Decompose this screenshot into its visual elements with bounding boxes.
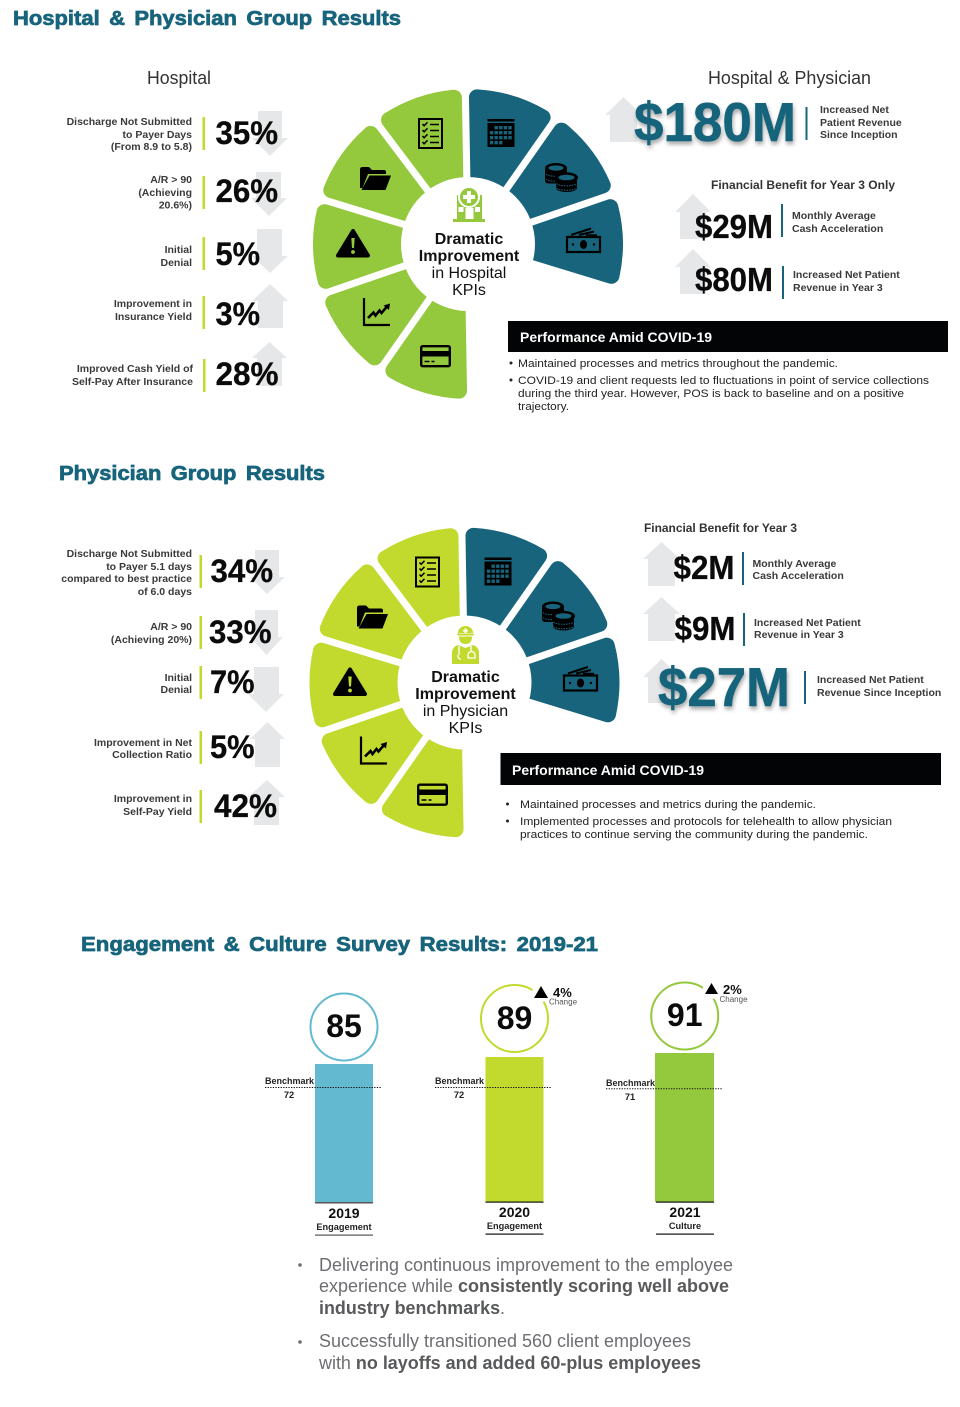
icon: checklist <box>416 558 439 586</box>
benchmark <box>606 1078 722 1102</box>
heading: Hospital: Hospital <box>147 67 211 88</box>
icon: line chart <box>364 298 390 325</box>
icon: money <box>567 228 600 252</box>
chart: survey bar 2020 <box>435 984 578 1235</box>
callout: $2M: Cash Acceleration <box>752 570 844 582</box>
KPI: insurance yield 3% <box>114 284 288 332</box>
year label: 2019 <box>328 1205 360 1221</box>
text block: survey takeaways: Successfully transitioned 560 client employees <box>319 1330 691 1351</box>
heading: engagement & culture survey results: Engagement & Culture Survey Results: 2019-21 <box>81 934 598 956</box>
wedges: revenue segments (teal) <box>447 93 616 278</box>
heading: financial benefit year 3 only: Financial Benefit for Year 3 Only <box>711 178 895 192</box>
year label <box>656 1204 714 1235</box>
center label: KPIs <box>452 282 486 299</box>
KPI: A/R over 90 26% <box>138 172 287 216</box>
center label: in Physician <box>423 703 508 720</box>
title: Hospital & Physician Group Results <box>13 8 401 30</box>
callout: $180M <box>605 91 902 153</box>
callout: $80M: Revenue in Year 3 <box>793 282 883 294</box>
KPI: discharge not submitted 35% <box>67 111 288 156</box>
KPI: discharge not submitted 35%: (From 8.9 to 5.8) <box>111 141 192 153</box>
KPI: initial denial 5%: 5% <box>216 236 260 272</box>
change indicator <box>702 981 748 1004</box>
KPI: initial denial 7%: 7% <box>210 664 254 700</box>
KPI: net collection ratio 5%: 5% <box>210 729 254 765</box>
KPI: discharge not submitted 34%: compared to best practice <box>61 573 192 585</box>
panel: hospital performance amid COVID-19: COVID-19 and client requests led to fluctuations in point of service collections <box>518 375 929 387</box>
callout: $9M: $9M <box>674 611 736 648</box>
panel: physician performance amid COVID-19: practices to continue serving the community during the pandemic. <box>520 829 868 841</box>
callout: $9M <box>643 597 861 648</box>
panel: physician performance amid COVID-19: Maintained processes and metrics during the pandemic. <box>520 799 816 811</box>
callout: $27M: Increased Net Patient <box>817 674 924 686</box>
KPI: A/R over 90 33%: (Achieving 20%) <box>111 634 192 646</box>
icon: warning <box>338 231 368 256</box>
change indicator: Change <box>720 995 748 1004</box>
icon: calendar <box>484 558 512 586</box>
icon: folder <box>357 606 388 628</box>
panel: physician performance amid COVID-19: Implemented processes and protocols for telehealth to allow physician <box>520 816 892 828</box>
change indicator: 4% <box>553 985 572 1000</box>
benchmark: 72 <box>284 1090 294 1100</box>
icon: checklist <box>419 119 442 148</box>
KPI: initial denial 5%: Initial <box>165 244 192 256</box>
benchmark: Benchmark <box>606 1078 656 1088</box>
center label <box>415 669 516 737</box>
icon: folder <box>360 167 391 190</box>
center label: Improvement <box>415 686 516 703</box>
chart: physician KPI wheel <box>317 532 612 833</box>
icon: warning <box>335 670 365 694</box>
KPI: discharge not submitted 35%: Discharge Not Submitted <box>67 116 192 128</box>
icon: hospital <box>453 186 485 222</box>
KPI: initial denial 5%: Denial <box>160 257 192 269</box>
icon: credit card <box>418 785 447 805</box>
icon: money <box>564 667 597 690</box>
benchmark: 71 <box>625 1092 635 1102</box>
score circle <box>310 994 378 1060</box>
KPI: initial denial 7%: Initial <box>165 672 192 684</box>
heading: physician group results: Physician Group Results <box>59 463 325 485</box>
KPI: net collection ratio 5%: Improvement in Net <box>94 737 192 749</box>
KPI: discharge not submitted 34%: 34% <box>210 553 273 589</box>
callout: $2M: Monthly Average <box>752 558 836 570</box>
icon: coins <box>542 602 575 630</box>
change indicator: Change <box>549 998 578 1006</box>
chart: survey bar 2019 <box>265 994 381 1236</box>
panel: physician financial benefit <box>643 521 941 718</box>
KPI: discharge not submitted 35%: 35% <box>216 115 278 151</box>
panel: hospital performance amid COVID-19: trajectory. <box>518 401 569 413</box>
center label: Improvement <box>419 248 520 265</box>
year label: Engagement <box>316 1222 372 1232</box>
callout: $27M: Revenue Since Inception <box>817 687 941 699</box>
panel: hospital & physician revenue callouts <box>605 91 902 299</box>
callout: $2M: $2M <box>674 550 734 587</box>
change indicator: 2% <box>723 982 742 997</box>
benchmark: Benchmark <box>265 1076 315 1086</box>
text block: survey takeaways: Delivering continuous improvement to the employee <box>319 1254 733 1275</box>
callout: $80M <box>675 249 900 299</box>
icon: line chart <box>361 736 387 764</box>
chart: survey bar 2021 <box>606 981 748 1235</box>
KPI: discharge not submitted 34%: to Payer 5.1 days <box>106 561 192 573</box>
KPI: discharge not submitted 34%: of 6.0 days <box>138 586 192 598</box>
panel: hospital KPI list <box>67 111 288 392</box>
KPI: cash yield 28%: Improved Cash Yield of <box>77 363 193 375</box>
KPI: net collection ratio 5% <box>94 722 285 767</box>
chart: hospital KPI wheel <box>320 93 616 395</box>
KPI: A/R over 90 26%: A/R > 90 <box>150 174 192 186</box>
KPI: cash yield 28%: 28% <box>216 356 278 392</box>
bar <box>315 1064 373 1202</box>
callout: $29M: $29M <box>695 209 773 246</box>
callout: $29M <box>675 194 883 246</box>
KPI: initial denial 7%: Denial <box>160 684 192 696</box>
year label: 2021 <box>669 1204 701 1220</box>
panel: hospital performance amid COVID-19: Performance Amid COVID-19 <box>520 329 712 345</box>
icon: coins <box>545 163 578 192</box>
center label: in Hospital <box>432 265 506 282</box>
KPI: insurance yield 3%: Improvement in <box>114 298 192 310</box>
wedges: KPI segments (green) <box>320 94 489 395</box>
KPI: initial denial 7% <box>160 664 284 712</box>
KPI: discharge not submitted 35%: to Payer Days <box>123 129 192 141</box>
callout: $80M: $80M <box>695 262 773 299</box>
year label <box>315 1205 373 1236</box>
center label: KPIs <box>449 720 482 737</box>
panel: physician performance amid COVID-19 <box>500 753 941 841</box>
text block: survey takeaways: industry benchmarks. <box>319 1297 505 1318</box>
year label: 2020 <box>499 1204 530 1220</box>
panel: hospital performance amid COVID-19: Maintained processes and metrics throughout the pandemic. <box>518 358 838 370</box>
year label: Culture <box>669 1221 701 1231</box>
panel: hospital performance amid COVID-19: during the third year. However, POS is back to baseline and on a positive <box>518 388 904 400</box>
callout: $180M: Since Inception <box>820 129 898 141</box>
callout: $80M: Increased Net Patient <box>793 269 900 281</box>
benchmark <box>265 1076 381 1100</box>
KPI: A/R over 90 33% <box>111 610 283 655</box>
center label: Dramatic <box>431 669 500 686</box>
benchmark <box>435 1076 552 1100</box>
KPI: A/R over 90 26%: 26% <box>216 173 278 209</box>
score circle: 89 <box>497 1000 532 1036</box>
KPI: A/R over 90 33%: 33% <box>209 614 272 650</box>
callout: $27M <box>643 656 941 718</box>
KPI: net collection ratio 5%: Collection Ratio <box>112 749 192 761</box>
panel: physician performance amid COVID-19: Performance Amid COVID-19 <box>512 762 704 778</box>
KPI: self-pay yield 42%: Self-Pay Yield <box>123 806 192 818</box>
KPI: insurance yield 3%: Insurance Yield <box>115 311 192 323</box>
callout: $180M: Increased Net <box>820 104 889 116</box>
KPI: initial denial 5% <box>160 229 288 273</box>
KPI: A/R over 90 26%: (Achieving <box>138 187 192 199</box>
text block: survey takeaways <box>298 1254 733 1373</box>
benchmark: Benchmark <box>435 1076 485 1086</box>
text block: survey takeaways: experience while consistently scoring well above <box>319 1275 729 1296</box>
center label: Dramatic <box>435 231 503 248</box>
callout: $9M: Increased Net Patient <box>754 617 861 629</box>
text block: survey takeaways: with no layoffs and added 60-plus employees <box>318 1352 701 1373</box>
KPI: cash yield 28%: Self-Pay After Insurance <box>72 376 193 388</box>
callout: $9M: Revenue in Year 3 <box>754 629 844 641</box>
bar <box>486 1057 544 1202</box>
callout: $27M: $27M <box>658 656 790 718</box>
KPI: cash yield 28% <box>72 342 287 392</box>
callout: $2M <box>643 542 844 587</box>
callout: $29M: Cash Acceleration <box>792 223 883 235</box>
bar <box>655 1053 714 1202</box>
score circle <box>651 982 718 1050</box>
heading: financial benefit year 3: Financial Benefit for Year 3 <box>644 521 797 535</box>
score circle <box>481 985 548 1052</box>
year label <box>486 1204 544 1235</box>
KPI: A/R over 90 26%: 20.6%) <box>159 200 192 212</box>
KPI: discharge not submitted 34%: Discharge Not Submitted <box>67 548 192 560</box>
callout: $180M: Patient Revenue <box>820 117 902 129</box>
panel: physician KPI list <box>61 548 285 825</box>
year label: Engagement <box>487 1221 542 1231</box>
panel: hospital performance amid COVID-19 <box>508 321 948 413</box>
wedges: revenue segments (teal) <box>444 532 612 716</box>
icon: credit card <box>421 346 450 366</box>
score circle: 85 <box>326 1008 362 1044</box>
heading: Hospital & Physician: Hospital & Physician <box>708 67 871 88</box>
wedges: KPI segments (lime) <box>317 532 485 833</box>
KPI: A/R over 90 33%: A/R > 90 <box>150 621 192 633</box>
KPI: insurance yield 3%: 3% <box>216 296 260 332</box>
score circle: 91 <box>667 997 702 1033</box>
icon: calendar <box>488 119 514 147</box>
center label <box>419 231 520 299</box>
benchmark: 72 <box>454 1090 464 1100</box>
KPI: self-pay yield 42%: Improvement in <box>114 793 192 805</box>
KPI: self-pay yield 42% <box>114 780 285 825</box>
change indicator <box>532 984 578 1006</box>
KPI: self-pay yield 42%: 42% <box>214 788 277 824</box>
callout: $180M: $180M <box>634 91 796 153</box>
icon: physician <box>452 626 479 664</box>
KPI: discharge not submitted 34% <box>61 548 285 598</box>
callout: $29M: Monthly Average <box>792 210 876 222</box>
